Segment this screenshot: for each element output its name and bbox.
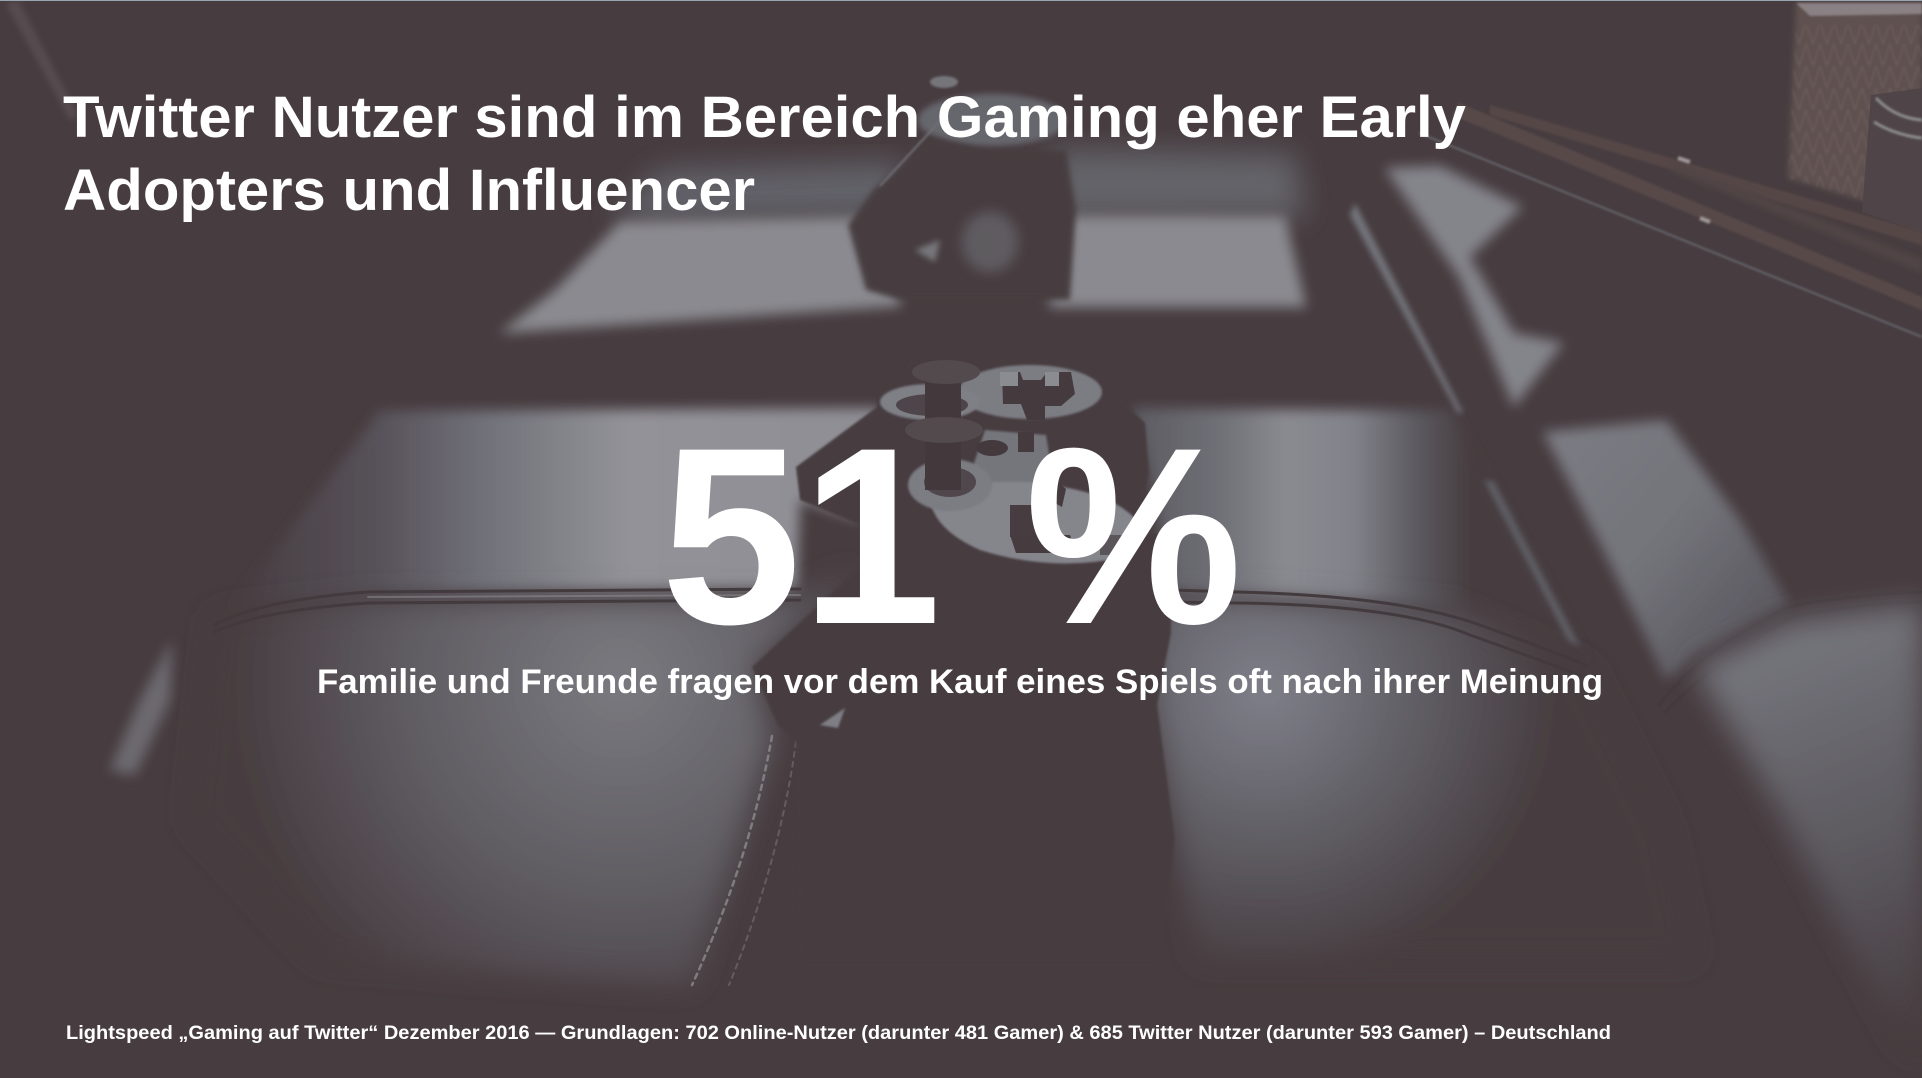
- source footnote: Lightspeed „Gaming auf Twitter“ Dezember 2016 — Grundlagen: 702 Online-Nutzer (darunter 481 Gamer) & 685 Twitter Nutzer (darunter 593 Gamer) – Deutschland: [66, 1022, 1611, 1044]
- left decoration strip: [6, 0, 78, 120]
- top edge line: [0, 0, 1922, 1]
- lower stick: [925, 435, 961, 490]
- reflection light: [820, 708, 845, 728]
- rear controller: [848, 76, 1076, 300]
- title: [63, 85, 1466, 223]
- key figure description: Familie und Freunde fragen vor dem Kauf eines Spiels oft nach ihrer Meinung: [317, 663, 1603, 701]
- title: Twitter Nutzer sind im Bereich Gaming eher Early: [63, 85, 1466, 150]
- main cushion right top: [1133, 408, 1586, 660]
- upper stick: [925, 372, 961, 422]
- middle plate: [965, 430, 1056, 495]
- dpad: [1002, 372, 1075, 420]
- right cushion top panel: [1543, 420, 1788, 680]
- bamboo sticks and glass jars: [1419, 3, 1922, 337]
- title: Adopters und Influencer: [63, 158, 755, 223]
- main cushion right bottom: [1150, 596, 1695, 960]
- upper faceplate: [958, 365, 1102, 419]
- right cushion upper highlight: [1385, 166, 1563, 407]
- front controller: [752, 360, 1175, 960]
- right cushion lower panel: [1696, 604, 1922, 1060]
- left highlight: [110, 640, 172, 775]
- main cushion left top: [233, 408, 880, 607]
- rear cushion: [500, 150, 1306, 333]
- main cushion left bottom: [190, 565, 862, 985]
- thin strip by seam: [1350, 203, 1463, 413]
- lower faceplate: [930, 482, 1139, 563]
- stitching: [214, 589, 1922, 985]
- key figure: 51 %: 51: [661, 396, 941, 677]
- key figure: 51 %: [661, 396, 1242, 677]
- left ring: [880, 384, 980, 420]
- controller silhouette: [752, 360, 1175, 960]
- key figure: 51 %: %: [1025, 396, 1242, 677]
